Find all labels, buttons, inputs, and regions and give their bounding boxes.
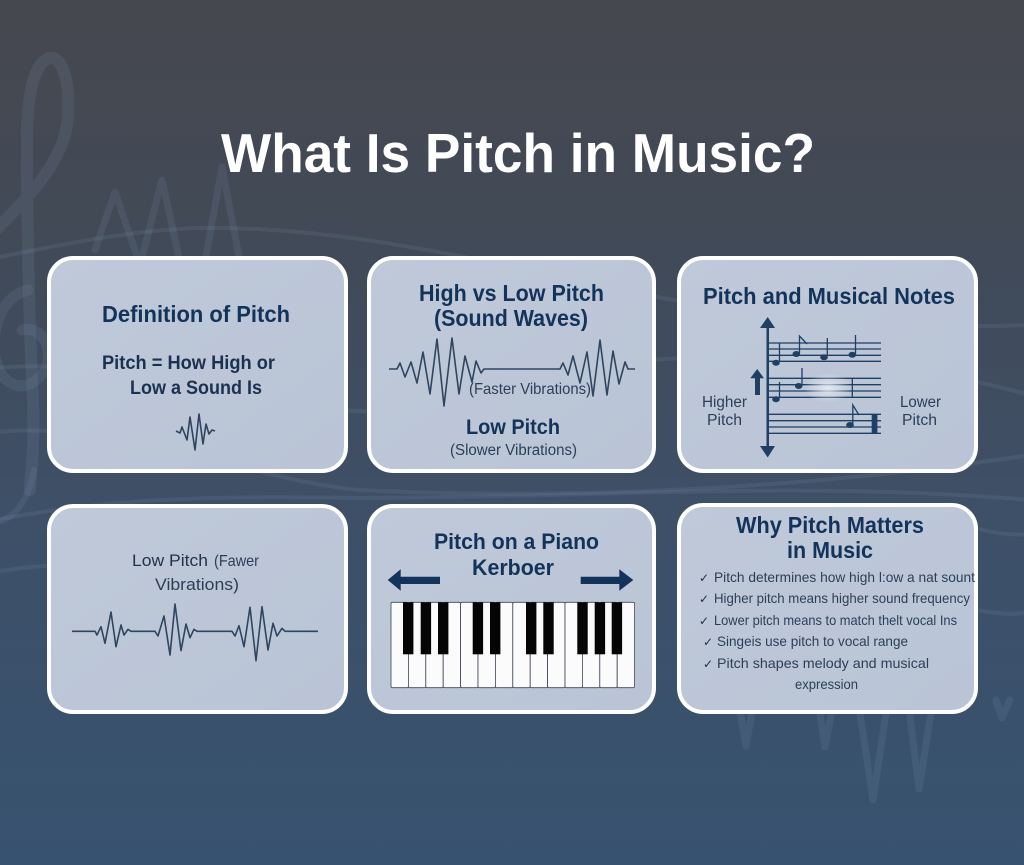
text: low pitch fewer vibrations: Low Pitch xyxy=(132,551,208,570)
checklist: ✓ xyxy=(699,571,709,585)
label: higher pitch: Pitch xyxy=(707,412,742,429)
heading: high vs low pitch xyxy=(419,280,604,331)
checklist: Pitch shapes melody and musical xyxy=(717,655,929,671)
checklist: Higher pitch means higher sound frequency xyxy=(714,590,970,606)
text: low pitch fewer vibrations: Vibrations) xyxy=(155,575,239,594)
checklist: ✓ xyxy=(703,657,713,671)
label: lower pitch: Lower xyxy=(900,394,941,411)
arrow: right xyxy=(581,569,633,591)
text: low pitch fewer vibrations xyxy=(132,551,260,594)
heading: definition of pitch: Definition of Pitch xyxy=(102,301,290,327)
heading: why pitch matters: Why Pitch Matters xyxy=(736,512,924,538)
label: higher pitch xyxy=(702,394,747,429)
highlight glow xyxy=(804,373,852,403)
icon: small sound wave xyxy=(176,414,215,450)
checklist: Lower pitch means to match thelt vocal Ins xyxy=(714,612,957,628)
small up arrow xyxy=(750,369,764,395)
arrow: left xyxy=(388,569,440,591)
checklist: ✓ xyxy=(699,614,709,628)
label: faster vibrations: (Faster Vibrations) xyxy=(469,381,591,398)
checklist xyxy=(699,569,975,692)
text: low pitch fewer vibrations: (Fawer xyxy=(214,553,260,570)
checklist: Singeis use pitch to vocal range xyxy=(717,633,908,649)
heading: pitch on a piano: Pitch on a Piano xyxy=(434,529,599,554)
definition text: Pitch = How High or xyxy=(102,353,276,374)
panel: why pitch matters xyxy=(679,505,976,712)
heading: why pitch matters xyxy=(736,512,924,563)
definition text: Low a Sound Is xyxy=(130,378,262,399)
white keys xyxy=(391,602,635,688)
piano keyboard xyxy=(391,602,635,688)
label: higher pitch: Higher xyxy=(702,394,747,411)
heading: high vs low pitch: High vs Low Pitch xyxy=(419,280,604,306)
panel: high vs low pitch xyxy=(369,258,654,471)
checklist: ✓ xyxy=(703,635,713,649)
label: lower pitch: Pitch xyxy=(902,412,937,429)
panel: low pitch wave xyxy=(49,506,346,712)
heading: pitch on a piano: Kerboer xyxy=(472,555,554,580)
chart: music staves with notes xyxy=(750,317,881,458)
heading: why pitch matters: in Music xyxy=(787,537,873,563)
title: What Is Pitch in Music? xyxy=(221,122,815,184)
chart: low pitch wave xyxy=(72,604,318,661)
heading: pitch on a piano xyxy=(434,529,599,580)
checklist: expression xyxy=(795,676,858,692)
chart: sound wave xyxy=(389,338,635,406)
black keys xyxy=(403,602,622,654)
panel: pitch on a piano xyxy=(369,506,654,712)
label: low pitch: Low Pitch xyxy=(466,416,560,439)
note heads and stems xyxy=(772,335,877,433)
definition text xyxy=(102,353,276,399)
panel: definition of pitch xyxy=(49,258,346,471)
label: lower pitch xyxy=(900,394,941,429)
panel: pitch and musical notes xyxy=(679,258,976,471)
checklist: ✓ xyxy=(699,592,709,606)
heading: high vs low pitch: (Sound Waves) xyxy=(434,305,588,331)
label: slower vibrations: (Slower Vibrations) xyxy=(450,442,577,459)
heading: pitch and musical notes: Pitch and Musical Notes xyxy=(703,283,955,309)
vertical pitch arrow xyxy=(760,317,775,458)
staff lines xyxy=(768,343,881,433)
checklist: Pitch determines how high l:ow a nat sount xyxy=(714,569,975,585)
